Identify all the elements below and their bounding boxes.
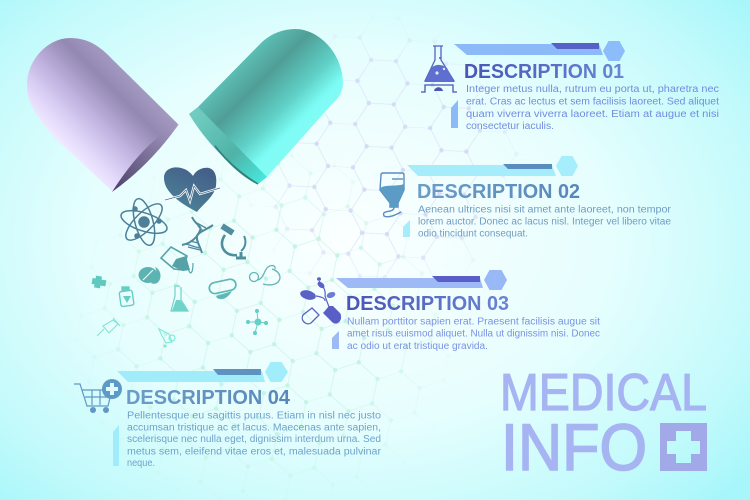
body text: scelerisque nec nulla eget, dignissim interdum urna. Sed (127, 434, 381, 445)
body text: erat. Cras ac lectus et sem facilisis laoreet. Sed aliquet (466, 96, 719, 108)
icon: syringe (97, 318, 120, 336)
icon: molecule (246, 309, 268, 335)
icon: microscope (222, 226, 246, 258)
body text: accumsan tristique ac et lacus. Maecenas ante sapien, (127, 422, 381, 434)
icon: iv bag (380, 173, 404, 217)
capsule rim (189, 107, 267, 184)
title: medical info: INFO (501, 410, 647, 484)
body text: quam viverra viverra laoreet. Etiam at augue et nisi (466, 109, 719, 120)
accent bar (451, 100, 458, 128)
body text: amet risus euismod aliquet. Nulla ut dignissim nisi. Donec (347, 328, 600, 340)
body text: Integer metus nulla, rutrum eu porta ut, pharetra nec (466, 84, 719, 95)
icon: capsule (208, 278, 237, 299)
capsule opening (112, 124, 179, 192)
icon: flask (171, 286, 188, 311)
body text: metus sem, eleifend vitae eros et, malesuada pulvinar (127, 446, 382, 458)
icon: shopping cart (74, 379, 122, 413)
icon: heart with pulse (164, 167, 220, 212)
body text (127, 410, 382, 469)
accent bar (113, 425, 119, 466)
body text (418, 204, 672, 240)
heading: DESCRIPTION 02 (417, 180, 580, 203)
icon: round pills (138, 267, 161, 284)
icon: dna helix (182, 217, 213, 253)
icon: lab flask on burner (421, 46, 457, 92)
capsule: purple half (27, 38, 179, 192)
body text: neque. (127, 458, 155, 469)
icon: medicine bottle (119, 287, 134, 307)
panel: description 04 (74, 362, 382, 469)
heading: DESCRIPTION 04 (126, 386, 291, 409)
body text: Aenean ultrices nisi sit amet ante laoreet, non tempor (418, 204, 672, 216)
accent bar (332, 331, 339, 349)
body text: odio tincidunt consequat. (418, 228, 528, 240)
header bar (336, 270, 507, 290)
header bar (454, 41, 625, 61)
body text: consectetur iaculis. (466, 121, 554, 132)
body text: lorem auctor. Donec ac lacus nisl. Integer vel libero vitae (418, 216, 672, 228)
title: medical info (500, 364, 707, 484)
body text (466, 84, 719, 132)
body text: Pellentesque eu sagittis purus. Etiam in nisl nec justo (127, 410, 382, 422)
icon: atom (118, 196, 170, 248)
body text: Nullam porttitor sapien erat. Praesent facilisis augue sit (347, 316, 600, 328)
icon: stethoscope (250, 266, 280, 285)
icon: cross box (660, 423, 707, 471)
accent bar (403, 220, 410, 237)
heading: DESCRIPTION 01 (464, 60, 624, 83)
icon: small cart (159, 329, 175, 347)
capsule: teal half (189, 29, 343, 184)
panel: description 03 (299, 270, 600, 352)
panel: description 02 (380, 156, 672, 240)
icon: cross (91, 275, 107, 289)
icon: infusion bottle (161, 247, 193, 273)
header bar (407, 156, 578, 176)
title: medical info: MEDICAL (500, 364, 707, 422)
header bar (117, 362, 288, 382)
heading: DESCRIPTION 03 (346, 292, 509, 315)
panel: description 01 (421, 41, 719, 132)
body text: ac odio ut erat tristique gravida. (347, 341, 488, 352)
body text (347, 316, 600, 352)
icon: plant and capsule (299, 277, 341, 324)
